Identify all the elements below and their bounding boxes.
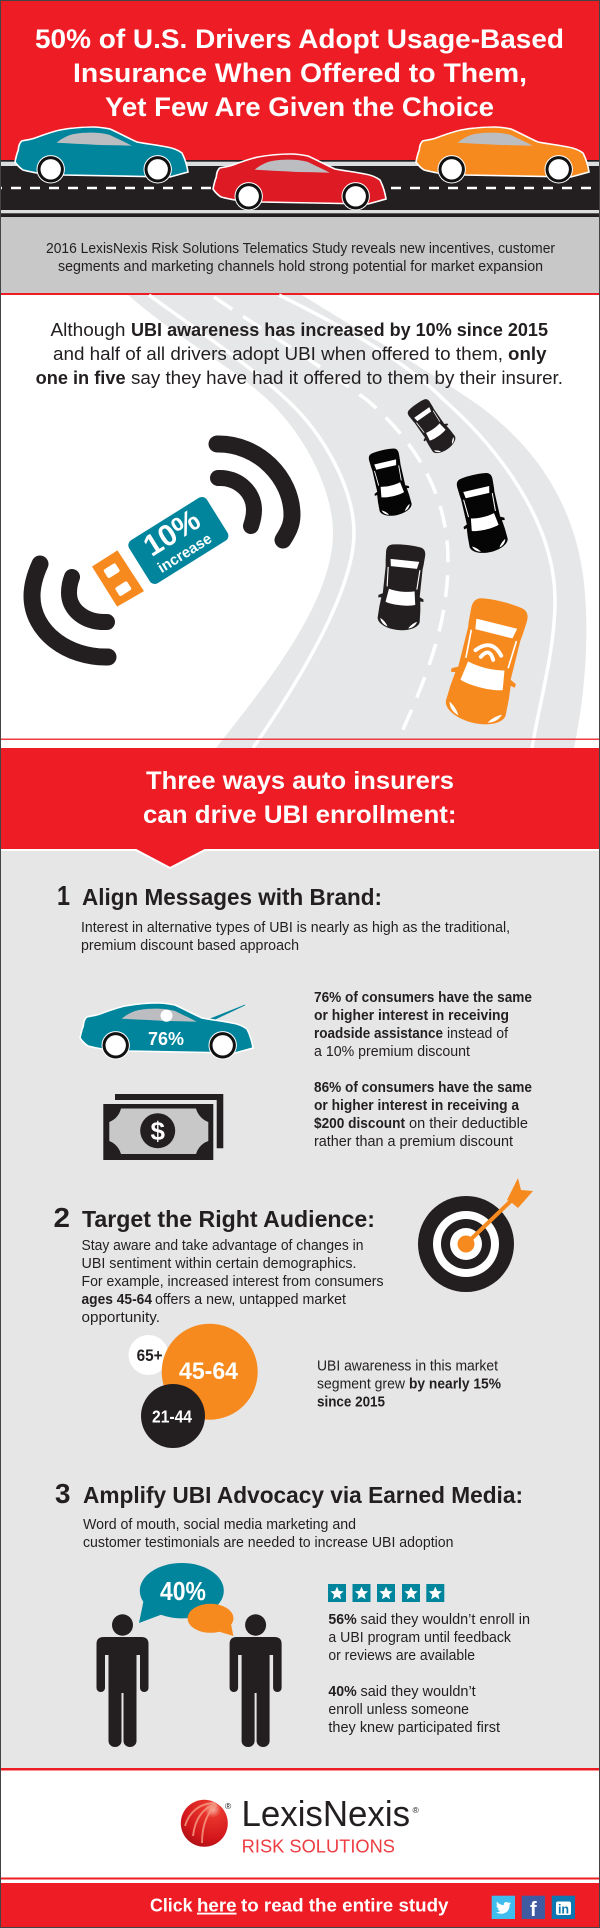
stat: 40%: said they wouldn’t bbox=[360, 1683, 476, 1700]
black cars on road bbox=[365, 396, 511, 632]
speech bubble: teal: 40% bbox=[160, 1576, 206, 1606]
stat: 76%: 76% of consumers have the same bbox=[314, 989, 532, 1006]
description 2: opportunity. bbox=[82, 1309, 160, 1326]
stat: 56%: a UBI program until feedback bbox=[328, 1629, 511, 1646]
stat: 86%: rather than a premium discount bbox=[314, 1133, 514, 1150]
stat: 56% bbox=[328, 1611, 530, 1664]
description 2: UBI sentiment within certain demographics. bbox=[82, 1255, 356, 1272]
age bubbles bbox=[128, 1324, 258, 1448]
logo: registered marks: ® bbox=[412, 1805, 420, 1815]
stat: 86%: or higher interest in receiving a bbox=[314, 1097, 520, 1114]
orange car with wifi bbox=[440, 594, 534, 731]
stat: 76%: roadside assistance bbox=[314, 1025, 443, 1042]
heading 3: Amplify UBI Advocacy via Earned Media: bbox=[83, 1482, 523, 1508]
intro text block: one in five bbox=[36, 367, 126, 388]
number 2: 2 bbox=[54, 1202, 70, 1233]
description 1 bbox=[81, 919, 510, 954]
stat: awareness growth: segment grew bbox=[317, 1376, 405, 1393]
car: red bbox=[213, 154, 386, 210]
stat: 86%: on their deductible bbox=[409, 1115, 528, 1132]
car top view 3 bbox=[453, 470, 511, 557]
five star rating bbox=[328, 1584, 444, 1602]
footer link text: to read the entire study bbox=[241, 1895, 449, 1916]
number 1: 1 bbox=[57, 880, 70, 911]
icon: linkedin bbox=[552, 1896, 575, 1919]
stat: awareness growth: since 2015 bbox=[317, 1394, 385, 1411]
car top view 1 bbox=[404, 396, 459, 457]
icon: money bbox=[103, 1094, 223, 1160]
road strip bbox=[0, 160, 600, 217]
stat: 86%: $200 discount bbox=[314, 1115, 405, 1132]
intro text block: only bbox=[508, 343, 547, 364]
title: Insurance When Offered to Them, bbox=[73, 58, 527, 88]
stat: 56%: or reviews are available bbox=[328, 1647, 475, 1664]
banner heading bbox=[143, 767, 456, 829]
stat: 76%: a 10% premium discount bbox=[314, 1043, 471, 1060]
stat: awareness growth: by nearly 15% bbox=[409, 1376, 501, 1393]
description 2: For example, increased interest from consumers bbox=[82, 1273, 384, 1290]
age bubbles: 21-44 bbox=[152, 1407, 192, 1427]
speech bubble: teal bbox=[139, 1563, 224, 1623]
stat: 56%: 56% bbox=[328, 1611, 357, 1628]
footer link text: here bbox=[197, 1895, 236, 1916]
description 3: customer testimonials are needed to increase UBI adoption bbox=[83, 1534, 454, 1551]
intro text block: UBI awareness has increased by 10% since 2015 bbox=[131, 319, 548, 340]
icon: car with open hood bbox=[80, 1003, 253, 1060]
footer link text: Click bbox=[150, 1895, 193, 1916]
description 1: Interest in alternative types of UBI is nearly as high as the traditional, bbox=[81, 919, 510, 936]
stat: 40%: enroll unless someone bbox=[328, 1701, 469, 1718]
description 2: ages 45-64 bbox=[82, 1291, 153, 1308]
stat: 86%: 86% of consumers have the same bbox=[314, 1079, 532, 1096]
stat: 56%: said they wouldn’t enroll in bbox=[360, 1611, 530, 1628]
footer link text bbox=[150, 1895, 449, 1916]
orange plug bbox=[93, 551, 143, 606]
stat: 40% bbox=[328, 1683, 501, 1736]
subtitle band bbox=[0, 217, 600, 295]
thin red rule bbox=[0, 738, 600, 740]
intro text block: Although bbox=[50, 319, 126, 340]
curved road illustration bbox=[128, 295, 586, 748]
subtitle band: 2016 LexisNexis Risk Solutions Telematics Study reveals new incentives, customer bbox=[46, 240, 555, 257]
icon: facebook bbox=[522, 1896, 545, 1921]
description 2: Stay aware and take advantage of changes in bbox=[82, 1237, 364, 1254]
description 3: Word of mouth, social media marketing and bbox=[83, 1516, 356, 1533]
icon: target with arrow bbox=[418, 1178, 533, 1292]
icon: linkedin: in bbox=[558, 1902, 569, 1916]
car: teal bbox=[15, 127, 188, 184]
banner heading: can drive UBI enrollment: bbox=[143, 801, 456, 829]
logo: tagline: RISK SOLUTIONS bbox=[242, 1837, 395, 1857]
icon: money: $ bbox=[150, 1116, 165, 1146]
header panel bbox=[0, 0, 600, 160]
stat: 40%: they knew participated first bbox=[328, 1719, 501, 1736]
stat: awareness growth: UBI awareness in this market bbox=[317, 1358, 499, 1375]
description 3 bbox=[83, 1516, 454, 1551]
signal arcs bbox=[32, 444, 292, 657]
heading 2: Target the Right Audience: bbox=[82, 1206, 375, 1232]
logo: globe bbox=[181, 1800, 228, 1847]
device label: increase bbox=[155, 530, 215, 577]
red banner bbox=[0, 748, 600, 868]
description 2: offers a new, untapped market bbox=[155, 1291, 347, 1308]
teal device bbox=[126, 495, 231, 586]
car top view 2 bbox=[365, 446, 415, 519]
car: orange bbox=[416, 127, 589, 184]
icon: car with open hood: 76% bbox=[148, 1028, 184, 1049]
description 1: premium discount based approach bbox=[81, 937, 299, 954]
title: Yet Few Are Given the Choice bbox=[105, 92, 494, 122]
stat: 76%: or higher interest in receiving bbox=[314, 1007, 509, 1024]
stat: 86% bbox=[314, 1079, 532, 1150]
subtitle band: segments and marketing channels hold strong potential for market expansion bbox=[58, 258, 543, 275]
stat: 40%: 40% bbox=[328, 1683, 357, 1700]
section 2 bbox=[54, 1178, 533, 1448]
logo: registered marks bbox=[225, 1801, 420, 1815]
section 3 bbox=[55, 1478, 530, 1747]
device label: 10% bbox=[138, 503, 206, 563]
banner heading: Three ways auto insurers bbox=[146, 767, 454, 795]
icon: telematics device with signal waves bbox=[32, 444, 292, 657]
age bubbles: 65+ bbox=[137, 1346, 163, 1365]
light grey content panel bbox=[0, 851, 600, 1768]
icon: right person bbox=[230, 1614, 282, 1747]
age bubbles: 45-64 bbox=[179, 1358, 238, 1385]
footer bar bbox=[0, 1878, 600, 1928]
logo: wordmark: LexisNexis bbox=[242, 1793, 410, 1834]
title bbox=[35, 24, 564, 122]
description 2 bbox=[82, 1237, 384, 1326]
speech bubble: orange bbox=[188, 1604, 234, 1636]
logo panel bbox=[0, 1768, 600, 1878]
title: 50% of U.S. Drivers Adopt Usage-Based bbox=[35, 24, 564, 54]
heading 1: Align Messages with Brand: bbox=[82, 884, 382, 910]
stat: 76% bbox=[314, 989, 532, 1060]
intro text block: and half of all drivers adopt UBI when offered to them, bbox=[53, 343, 503, 364]
icon: facebook: f bbox=[530, 1899, 537, 1921]
stat: awareness growth bbox=[317, 1358, 501, 1411]
stat: 76%: instead of bbox=[447, 1025, 509, 1042]
car top view 4 bbox=[375, 542, 429, 632]
icon: left person bbox=[96, 1614, 148, 1747]
number 3: 3 bbox=[55, 1478, 70, 1509]
logo: registered marks: ® bbox=[225, 1801, 232, 1811]
intro text block: say they have had it offered to them by their insurer. bbox=[131, 367, 563, 388]
section 1 bbox=[57, 880, 532, 1160]
intro text block bbox=[36, 319, 563, 388]
icon: twitter bbox=[492, 1896, 515, 1919]
